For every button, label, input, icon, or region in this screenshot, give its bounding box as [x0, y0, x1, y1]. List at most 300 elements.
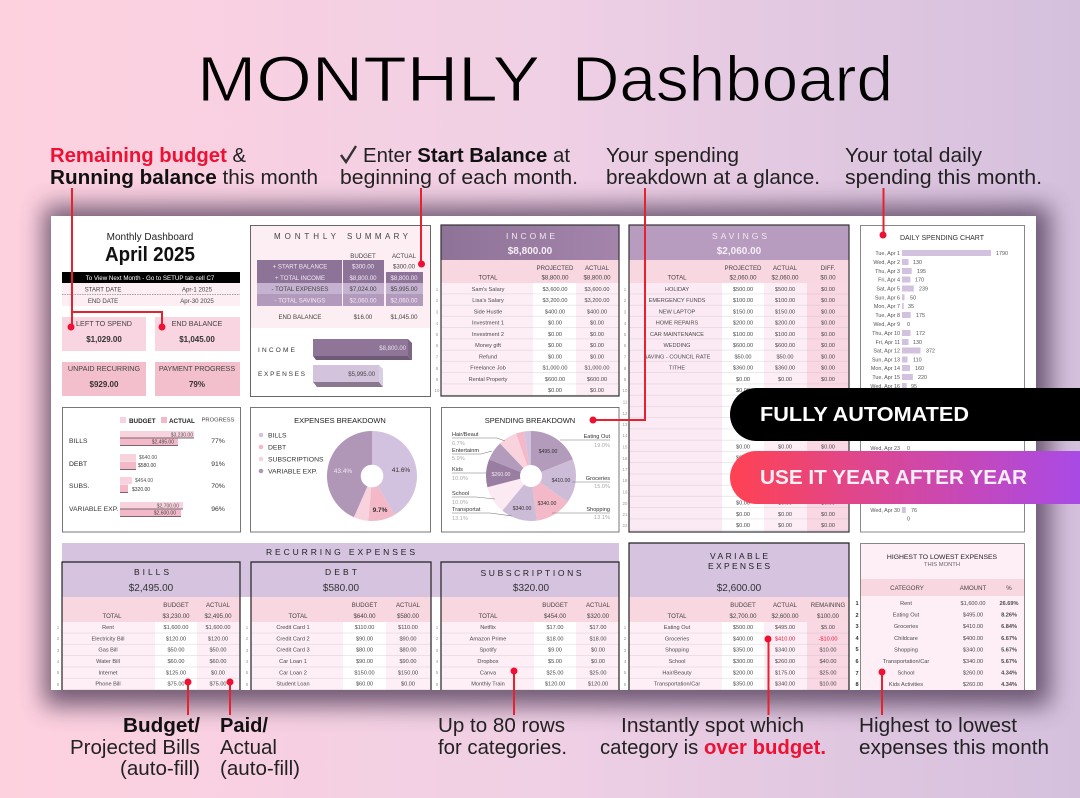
annotation: spending breakdown: Your spending — [606, 145, 739, 167]
panel: bills table: Internet — [99, 670, 118, 676]
panel: savings table: 3 — [624, 310, 627, 314]
pie chart — [327, 431, 417, 521]
panel: savings table: $0.00 — [778, 388, 792, 394]
bar: expenses — [258, 365, 383, 387]
panel: debt table: 6 — [246, 682, 249, 687]
panel: variable expenses table: Transportation/Car — [654, 682, 700, 688]
panel: subscriptions table: Dropbox — [477, 659, 499, 665]
panel: variable expenses table: $495.00 — [775, 625, 795, 631]
panel: debt table: $90.00 — [399, 636, 417, 642]
panel: savings table: $0.00 — [821, 321, 835, 327]
panel: highest to lowest expenses: $260.00 — [963, 682, 983, 688]
panel: savings table: $360.00 — [733, 366, 753, 372]
panel: income table: $3,200.00 — [543, 298, 567, 304]
panel: bills table: $0.00 — [211, 670, 225, 676]
title — [197, 43, 893, 115]
panel: highest to lowest expenses: 4 — [855, 636, 859, 642]
panel: bills table: 5 — [57, 670, 60, 675]
annotation: remaining budget: Running balance this month — [50, 167, 318, 189]
panel: subscriptions table: $120.00 — [545, 682, 565, 688]
panel: savings table: $100.00 — [733, 332, 753, 338]
annotation: daily spending: spending this month. — [845, 167, 1042, 189]
annotation: enter start balance: Enter Start Balance at — [363, 145, 570, 167]
pie chart: $495.00 — [539, 449, 557, 455]
panel: variable expenses table: $200.00 — [733, 670, 753, 676]
bar labels: 170 — [915, 278, 924, 284]
heading: monthly summary: MONTHLY — [274, 232, 337, 241]
bar labels: Fri, Apr 4 — [878, 278, 900, 284]
panel: subscriptions table: Spotify — [479, 648, 497, 654]
bar labels: Sat, Apr 5 — [876, 286, 900, 292]
panel: subscriptions table: TOTAL — [478, 613, 498, 620]
panel: savings table: $0.00 — [821, 456, 835, 462]
panel: income table: Lisa's Salary — [472, 298, 504, 304]
panel: highest to lowest expenses: % — [1006, 585, 1012, 592]
panel: savings table: SAVING - COUNCIL RATE — [644, 354, 711, 360]
panel: subscriptions table: $0.00 — [591, 648, 605, 654]
row: debt: DEBT — [69, 461, 87, 468]
panel: savings table: $0.00 — [821, 332, 835, 338]
panel: variable expenses table: Groceries — [665, 636, 689, 642]
panel: highest to lowest expenses: 5.67% — [1001, 659, 1017, 665]
panel: savings table: 13 — [623, 422, 628, 427]
panel: savings table: 8 — [624, 366, 627, 371]
panel: date header — [62, 232, 240, 306]
legend — [120, 417, 235, 425]
panel: highest to lowest expenses: 6 — [855, 659, 859, 665]
panel: debt table: $80.00 — [399, 648, 417, 654]
panel: savings table: NEW LAPTOP — [659, 310, 696, 316]
panel: date header: Apr-30 2025 — [180, 298, 214, 305]
legend: PROGRESS — [202, 418, 235, 424]
panel: savings table: 17 — [623, 467, 628, 472]
panel: income table: $0.00 — [548, 354, 562, 360]
heading: subscriptions: SUBSCRIPTIONS — [480, 568, 582, 578]
legend: VARIABLE EXP. — [268, 468, 317, 476]
panel: variable expenses table: 1 — [624, 625, 627, 630]
panel: date header: To View Next Month - Go to SETUP tab cell C7 — [86, 275, 215, 282]
pie labels: 10.0% — [452, 476, 468, 482]
legend: ACTUAL — [169, 418, 195, 425]
panel: subscriptions table: BUDGET — [542, 602, 568, 609]
pie chart: 41.6% — [392, 467, 410, 474]
panel: savings table: $100.00 — [775, 332, 795, 338]
panel: subscriptions table: Canva — [480, 670, 497, 676]
bar: income — [258, 339, 412, 360]
bars — [902, 250, 991, 513]
panel: variable expenses table: Hair/Beauty — [662, 670, 692, 676]
panel: monthly summary — [250, 226, 430, 396]
panel: monthly summary: BUDGET — [350, 253, 376, 260]
panel: savings table: $360.00 — [775, 366, 795, 372]
summary table: $2,060.00 — [390, 298, 418, 304]
panel: savings table: $0.00 — [736, 388, 750, 394]
panel: highest to lowest expenses: $410.00 — [963, 624, 983, 630]
ribbon: fully automated: FULLY AUTOMATED — [760, 404, 969, 426]
summary table: $5,995.00 — [390, 286, 418, 293]
panel: savings table: DIFF. — [821, 265, 836, 272]
row: bills: $3,230.00 — [171, 432, 193, 438]
bar labels: 0 — [907, 446, 910, 452]
panel: left to spend card: LEFT TO SPEND — [76, 319, 132, 328]
pie labels: 6.7% — [452, 441, 465, 447]
panel: recurring expenses banner — [62, 543, 619, 597]
panel: variable expenses table: -$10.00 — [819, 636, 837, 642]
annotation: remaining budget — [50, 145, 318, 189]
panel: savings table: 5 — [624, 332, 627, 337]
panel: variable expenses table: $340.00 — [775, 682, 795, 688]
ribbon: fully automated — [730, 388, 1080, 441]
panel: income table: Investment 1 — [472, 321, 504, 327]
arrow: paid connector — [226, 678, 234, 715]
annotation: paid actual: (auto-fill) — [220, 758, 300, 780]
panel: income table: Rental Property — [469, 377, 508, 383]
bar labels: Mon, Apr 7 — [874, 304, 900, 310]
bar labels: 110 — [913, 358, 922, 364]
bar labels: Sun, Apr 6 — [875, 295, 900, 301]
panel: savings table: 6 — [624, 343, 627, 348]
annotation: budget projected bills: Budget/ — [123, 715, 200, 737]
panel: income table: PROJECTED — [537, 265, 574, 272]
panel: savings table: $0.00 — [736, 501, 750, 507]
panel: income table: $3,600.00 — [585, 287, 609, 293]
pie labels: 10.0% — [452, 500, 468, 506]
summary table: $7,024.00 — [349, 286, 377, 293]
panel: bills table: $50.00 — [209, 648, 227, 654]
annotation: over budget: category is over budget. — [600, 737, 826, 759]
panel: monthly summary: ACTUAL — [392, 253, 417, 260]
panel: savings table: $0.00 — [821, 377, 835, 383]
arrow: remaining budget connector — [68, 188, 166, 330]
panel: savings table: $0.00 — [821, 343, 835, 349]
panel: recurring expenses banner: RECURRING EXPENSES — [266, 547, 415, 557]
panel: income table: $8,800.00 — [583, 274, 611, 282]
panel: income table: 2 — [436, 298, 439, 303]
panel: budget vs actual bars — [62, 408, 240, 532]
summary table — [257, 260, 423, 321]
bar labels: Thu, Apr 10 — [872, 331, 900, 337]
pie labels: Groceries — [586, 476, 610, 482]
panel: debt table: $0.00 — [401, 682, 415, 688]
panel: savings table: $2,060.00 — [717, 246, 762, 257]
pie chart: $340.00 — [513, 506, 531, 512]
panel: variable expenses table: $400.00 — [733, 636, 753, 642]
panel: bills table: $3,230.00 — [162, 613, 190, 620]
legend: BILLS — [268, 432, 287, 440]
pie labels: 15.0% — [594, 484, 610, 490]
panel: debt table: 1 — [246, 625, 249, 630]
heading: variable expenses — [708, 551, 770, 594]
panel: bills table: Water Bill — [96, 659, 120, 665]
panel: savings table: 9 — [624, 377, 627, 382]
annotation: spending breakdown: breakdown at a glance. — [606, 167, 820, 189]
summary table: - TOTAL EXPENSES — [271, 286, 329, 293]
annotation: daily spending: Your total daily — [845, 145, 982, 167]
panel: income table: Freelance Job — [470, 366, 506, 372]
panel: variable expenses table: $10.00 — [819, 682, 837, 688]
panel: bills table — [57, 562, 240, 690]
annotation: highest to lowest: expenses this month — [859, 737, 1049, 759]
panel: variable expenses table: 5 — [624, 670, 627, 675]
bar labels: 130 — [913, 340, 922, 346]
panel: variable expenses table: $300.00 — [733, 659, 753, 665]
panel: savings table: $0.00 — [736, 456, 750, 462]
bar: expenses: $5,995.00 — [348, 372, 376, 378]
panel: debt table: $150.00 — [354, 670, 375, 676]
panel: savings table: $200.00 — [775, 321, 795, 327]
panel: date header: START DATE — [85, 286, 121, 294]
pie labels: 13.1% — [452, 516, 468, 522]
panel: bills table: 3 — [57, 648, 60, 653]
panel: date header: Apr-1 2025 — [182, 286, 213, 294]
row: variable expenses — [69, 502, 225, 517]
row: bills: $2,495.00 — [152, 440, 174, 446]
panel: variable expenses table: $175.00 — [775, 670, 795, 676]
panel: income table: 8 — [436, 366, 439, 371]
annotation: enter start balance — [340, 145, 578, 189]
panel: income table: $0.00 — [548, 388, 562, 394]
annotation: daily spending — [845, 145, 1042, 189]
annotation: paid actual — [220, 715, 300, 780]
annotation: over budget — [600, 715, 826, 759]
panel: savings table: $0.00 — [821, 512, 835, 518]
panel: debt table: $90.00 — [356, 636, 373, 642]
panel: income table: $0.00 — [548, 321, 562, 327]
panel: savings table: ACTUAL — [773, 265, 798, 272]
row: subscriptions: 70% — [211, 483, 225, 490]
annotation: paid actual: Actual — [220, 737, 277, 759]
bar labels: 1790 — [996, 251, 1008, 257]
panel: subscriptions table: $18.00 — [589, 636, 607, 642]
panel: income table: 5 — [436, 332, 439, 337]
panel: highest to lowest expenses: 8 — [855, 682, 859, 688]
panel: income table: $600.00 — [545, 377, 565, 383]
panel: end balance card: $1,045.00 — [179, 335, 215, 344]
panel: savings table: 4 — [624, 321, 627, 326]
panel: bills table: Electricity Bill — [92, 636, 124, 642]
pie labels — [452, 432, 610, 522]
pie labels: Hair/Beaut — [452, 432, 479, 438]
panel: bills table: $2,495.00 — [204, 613, 232, 620]
bar: expenses: EXPENSES — [258, 371, 306, 378]
panel: variable expenses table: $5.00 — [821, 625, 835, 631]
summary table: - TOTAL SAVINGS — [275, 298, 325, 304]
row: subscriptions — [69, 477, 225, 493]
panel: bills table: 1 — [57, 625, 60, 630]
panel: savings table: 10 — [623, 388, 628, 393]
panel: subscriptions table: 2 — [436, 636, 439, 641]
summary table: END BALANCE — [278, 314, 322, 321]
panel: income table: $1,000.00 — [543, 366, 567, 372]
heading: month: April 2025 — [105, 244, 195, 266]
bar labels: 76 — [911, 508, 917, 514]
pie labels: 5.9% — [452, 456, 465, 462]
annotation: remaining budget: Remaining budget & — [50, 145, 247, 167]
panel: bills table: $60.00 — [167, 659, 185, 665]
row: debt: $580.00 — [138, 463, 156, 469]
panel: savings table: $0.00 — [821, 366, 835, 372]
annotation: up to 80 rows — [438, 715, 567, 759]
panel: savings table: $0.00 — [778, 523, 792, 529]
bar labels: Wed, Apr 9 — [873, 322, 900, 328]
panel: savings table: 14 — [623, 433, 628, 438]
panel: income table: 3 — [436, 310, 439, 314]
panel: debt table: $90.00 — [356, 659, 373, 665]
panel: savings table: 19 — [623, 490, 628, 494]
panel: income table: $0.00 — [590, 321, 604, 327]
panel: variable expenses table: 6 — [624, 682, 627, 687]
bar labels: Sat, Apr 12 — [873, 348, 900, 354]
panel: daily spending chart — [860, 226, 1024, 532]
panel: savings table: 2 — [624, 298, 627, 303]
panel: variable expenses table: TOTAL — [667, 613, 687, 620]
panel: savings table: $0.00 — [778, 456, 792, 462]
panel: highest to lowest expenses: $1,600.00 — [961, 601, 985, 607]
heading: monthly summary: SUMMARY — [347, 232, 409, 241]
row: variable expenses: $2,700.00 — [157, 504, 179, 510]
panel: savings table: 18 — [623, 478, 628, 483]
panel: subscriptions table: Amazon Prime — [470, 636, 506, 642]
legend: DEBT — [268, 444, 286, 452]
panel: income table: $1,000.00 — [585, 366, 609, 372]
panel: income table: $0.00 — [590, 388, 604, 394]
panel: subscriptions table: $25.00 — [546, 670, 564, 676]
title: Dashboard — [572, 43, 893, 115]
panel: bills table: BUDGET — [163, 602, 189, 609]
heading: variable expenses: $2,600.00 — [717, 583, 762, 594]
panel: savings table: $0.00 — [778, 444, 792, 450]
pie labels: 19.0% — [594, 443, 610, 449]
row: variable expenses: $2,600.00 — [154, 510, 176, 516]
panel: highest to lowest expenses: $495.00 — [963, 613, 983, 619]
summary table: $8,800.00 — [349, 275, 377, 282]
panel: income table: 4 — [436, 321, 439, 326]
pie chart: $260.00 — [492, 472, 510, 478]
summary table: $300.00 — [393, 264, 416, 270]
pie chart: $410.00 — [552, 478, 570, 484]
panel: highest to lowest expenses: 4.34% — [1001, 682, 1017, 688]
panel: variable expenses table: $350.00 — [733, 682, 753, 688]
panel: subscriptions table: $120.00 — [588, 682, 608, 688]
panel: subscriptions table: $320.00 — [587, 613, 610, 620]
legend: SUBSCRIPTIONS — [268, 456, 324, 464]
panel: subscriptions table: ACTUAL — [586, 602, 611, 609]
summary table: + START BALANCE — [273, 264, 327, 270]
panel: highest to lowest expenses: $340.00 — [963, 647, 983, 653]
panel: debt table: $80.00 — [356, 648, 373, 654]
ribbon: use it year after year — [730, 451, 1080, 504]
panel: subscriptions table: 6 — [436, 682, 439, 687]
panel: savings table: 1 — [624, 287, 627, 292]
row: subscriptions: $454.00 — [135, 478, 153, 484]
panel: variable expenses table: $500.00 — [733, 625, 753, 631]
bar labels: Wed, Apr 30 — [870, 508, 900, 514]
panel: subscriptions table: Netflix — [480, 625, 496, 631]
panel: savings table: WEDDING — [663, 343, 691, 349]
panel: highest to lowest expenses: School — [897, 671, 915, 677]
panel: income table: Side Hustle — [474, 310, 502, 316]
panel: debt table — [246, 562, 431, 690]
arrow: spending breakdown connector — [590, 188, 645, 424]
panel: subscriptions table: 5 — [436, 670, 439, 675]
bar labels: 95 — [911, 384, 917, 390]
panel: savings table: $600.00 — [775, 343, 795, 349]
panel: highest to lowest expenses: $340.00 — [963, 659, 983, 665]
panel: bills table: $60.00 — [209, 659, 227, 665]
panel: end balance card: END BALANCE — [172, 319, 223, 328]
panel: savings table: 15 — [623, 444, 628, 450]
panel: bills table: 4 — [57, 659, 60, 664]
panel: debt table: $150.00 — [398, 670, 418, 676]
panel: variable expenses table: 2 — [624, 636, 627, 641]
bar labels: Wed, Apr 23 — [870, 446, 900, 452]
panel: income table: 9 — [436, 377, 439, 382]
panel: bills table: $1,600.00 — [164, 625, 188, 631]
panel: income table: $600.00 — [587, 377, 607, 383]
panel: debt table: $110.00 — [398, 625, 418, 631]
arrow: daily spending connector — [880, 188, 886, 238]
bar labels: Wed, Apr 16 — [870, 384, 900, 390]
row: variable expenses: 96% — [211, 506, 225, 513]
panel: variable expenses table: Eating Out — [664, 625, 691, 631]
pie chart: $340.00 — [538, 501, 556, 507]
panel: debt table: Car Loan 2 — [279, 670, 307, 676]
panel: savings table: CAR MAINTENANCE — [650, 332, 704, 338]
panel: income table: $3,600.00 — [543, 287, 567, 293]
panel: savings table: $600.00 — [733, 343, 753, 349]
panel: income table — [435, 225, 619, 396]
panel: bills table: ACTUAL — [206, 602, 231, 609]
panel: bills table: Gas Bill — [98, 648, 118, 654]
panel: subscriptions table: Monthly Train — [471, 682, 505, 688]
panel: highest to lowest expenses: $400.00 — [963, 636, 983, 642]
panel: subscriptions table: $320.00 — [513, 583, 550, 594]
bar labels: 130 — [913, 260, 922, 266]
panel: income table: 1 — [436, 287, 439, 292]
panel: savings table: 7 — [624, 354, 627, 360]
panel: savings table: PROJECTED — [725, 265, 762, 272]
panel: savings table: $150.00 — [775, 310, 795, 316]
pie labels: Transportat — [452, 507, 481, 513]
panel: highest to lowest expenses: AMOUNT — [960, 585, 986, 592]
panel: variable expenses table: $10.00 — [819, 648, 837, 654]
arrow: over budget connector — [764, 636, 772, 715]
panel: income table: $0.00 — [548, 332, 562, 338]
panel: debt table: Car Loan 1 — [279, 659, 307, 665]
annotation: up to 80 rows: for categories. — [438, 737, 567, 759]
panel: income table: Refund — [479, 354, 497, 360]
annotation: paid actual: Paid/ — [220, 715, 268, 737]
panel: bills table: $2,495.00 — [129, 583, 174, 594]
panel: variable expenses table: 4 — [624, 659, 627, 664]
panel: savings table: $150.00 — [733, 310, 753, 316]
panel: variable expenses table: BUDGET — [730, 602, 756, 609]
bar labels: 175 — [916, 313, 925, 319]
panel: savings table: EMERGENCY FUNDS — [649, 298, 706, 304]
panel: bills table: $75.00 — [209, 682, 227, 688]
panel: debt table: $580.00 — [397, 613, 420, 620]
panel: income table: $8,800.00 — [508, 246, 553, 257]
heading: variable expenses: EXPENSES — [708, 561, 770, 571]
panel: highest to lowest expenses: 5 — [855, 647, 859, 653]
panel: subscriptions table: $0.00 — [591, 659, 605, 665]
annotation: budget projected bills — [70, 715, 200, 780]
panel: unpaid recurring card — [62, 362, 146, 396]
arrow: rows connector — [510, 668, 518, 715]
panel: date header: END DATE — [88, 298, 118, 305]
panel: income table: 10 — [435, 388, 440, 393]
panel: income table: $0.00 — [548, 343, 562, 349]
